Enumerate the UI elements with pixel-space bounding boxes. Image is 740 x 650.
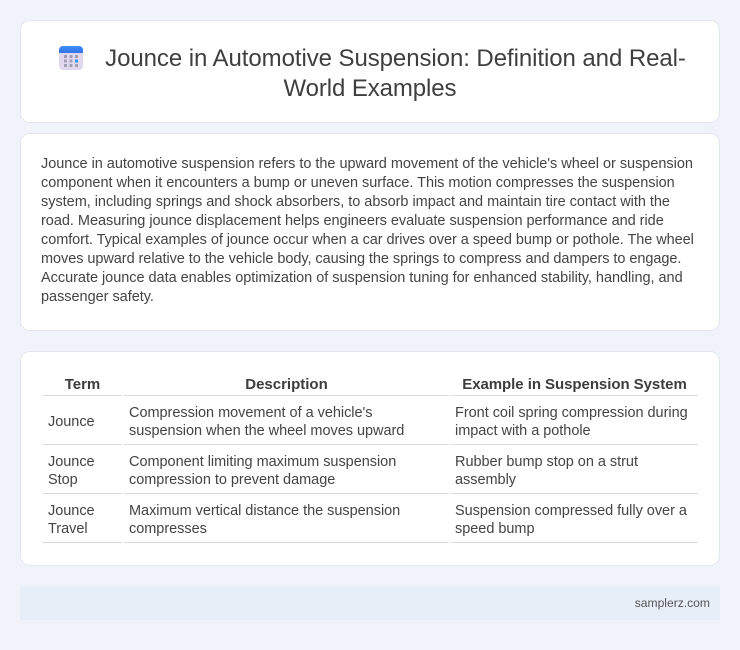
table row: Jounce Stop: compression to prevent damage bbox=[129, 472, 335, 488]
table row: Jounce Travel: Jounce bbox=[48, 503, 95, 519]
text block: definition paragraph: component when it encounters a bump or uneven surface. This motion compresses the suspension bbox=[41, 175, 675, 191]
table row: Jounce Travel bbox=[48, 503, 687, 537]
table row: Jounce Travel: Suspension compressed fully over a bbox=[455, 503, 687, 519]
table row: Jounce Stop: Rubber bump stop on a strut bbox=[455, 454, 638, 470]
table row: Jounce: Jounce bbox=[48, 414, 95, 430]
table header row bbox=[64, 376, 687, 393]
table row: Jounce Travel: Maximum vertical distance the suspension bbox=[129, 503, 400, 519]
table: jounce terms bbox=[43, 376, 698, 543]
footer bbox=[20, 586, 720, 620]
table row: Jounce Stop: Component limiting maximum suspension bbox=[129, 454, 396, 470]
table row: Jounce: suspension when the wheel moves upward bbox=[129, 423, 404, 439]
icon: calendar bbox=[59, 46, 83, 70]
table row: Jounce: Front coil spring compression during bbox=[455, 405, 688, 421]
table row: Jounce Travel: speed bump bbox=[455, 521, 535, 537]
table row: Jounce: Compression movement of a vehicle's bbox=[129, 405, 372, 421]
title: Jounce in Automotive Suspension: Definition and Real- bbox=[105, 45, 686, 72]
table row: Jounce: impact with a pothole bbox=[455, 423, 591, 439]
text block: definition paragraph: Accurate jounce data enables optimization of suspension tuning for enhanced stability, handling, and bbox=[41, 270, 683, 286]
text block: definition paragraph: passenger safety. bbox=[41, 289, 154, 305]
text block: definition paragraph: Jounce in automotive suspension refers to the upward movement of the vehicle's wheel or suspension bbox=[41, 156, 693, 172]
panel: table bbox=[20, 351, 720, 566]
text block: definition paragraph bbox=[41, 156, 694, 305]
text block: definition paragraph: moves upward relative to the vehicle body, causing the springs to compress and dampers to engage. bbox=[41, 251, 681, 267]
table header row: Example in Suspension System bbox=[462, 376, 687, 393]
table row: Jounce Stop: Stop bbox=[48, 472, 78, 488]
footer source text: samplerz.com bbox=[635, 596, 710, 610]
panel: intro text bbox=[20, 133, 720, 331]
table row: Jounce Stop: Jounce bbox=[48, 454, 95, 470]
table header row: Description bbox=[245, 376, 328, 393]
table header row: Term bbox=[65, 376, 100, 393]
title bbox=[105, 45, 686, 102]
title: World Examples bbox=[284, 75, 456, 102]
table row: Jounce bbox=[48, 405, 688, 439]
text block: definition paragraph: system, including springs and shock absorbers, to absorb impact and maintain tire contact with the bbox=[41, 194, 670, 210]
table row: Jounce Stop bbox=[48, 454, 638, 488]
table row: Jounce Travel: Travel bbox=[48, 521, 88, 537]
text block: definition paragraph: comfort. Typical examples of jounce occur when a car drives over a speed bump or pothole. The wheel bbox=[41, 232, 694, 248]
text block: definition paragraph: road. Measuring jounce displacement helps engineers evaluate suspension performance and ride bbox=[41, 213, 664, 229]
table row: Jounce Travel: compresses bbox=[129, 521, 207, 537]
panel: header bbox=[20, 20, 720, 123]
table row: Jounce Stop: assembly bbox=[455, 472, 516, 488]
